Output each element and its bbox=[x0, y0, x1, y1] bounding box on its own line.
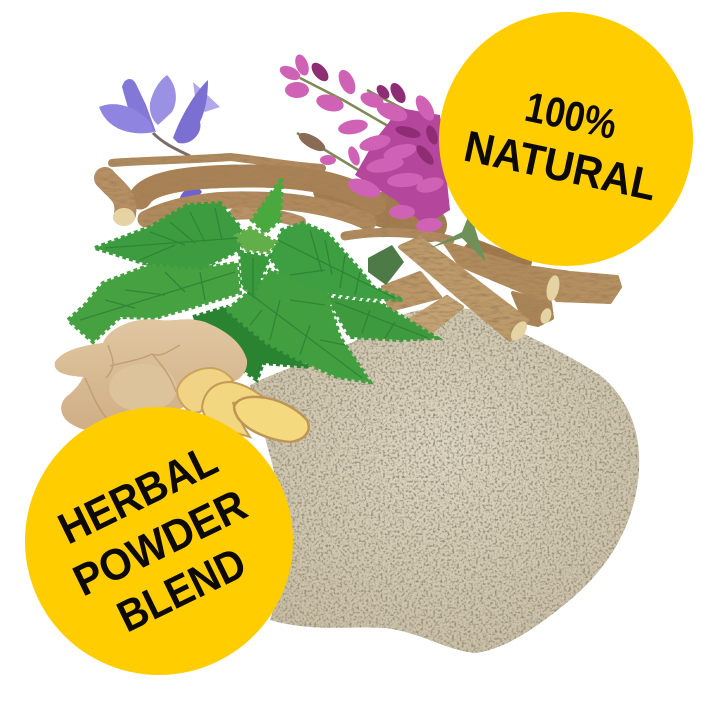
root: thin upper bbox=[112, 157, 322, 168]
leaf: middle small bbox=[240, 252, 270, 297]
badge: herbal powder blend bbox=[25, 407, 293, 675]
leaf: left lower bbox=[68, 263, 240, 342]
leaf: upper left bbox=[95, 203, 240, 268]
root: short behind leaf bbox=[235, 213, 300, 222]
roots bbox=[105, 157, 450, 240]
leaf: top sprout bbox=[252, 178, 282, 233]
flower mass bbox=[355, 108, 450, 225]
leaf veins bbox=[80, 208, 428, 378]
nettle leaves bbox=[68, 178, 437, 382]
text: powder: POWDER bbox=[66, 480, 255, 606]
leaf: upper right bbox=[270, 223, 403, 300]
powder pile bbox=[250, 308, 639, 653]
ginger slices bbox=[177, 368, 233, 413]
icon: blue flower bbox=[99, 75, 220, 200]
root: thick main bbox=[140, 176, 375, 204]
roots: right cluster bbox=[383, 238, 620, 340]
root: lower branch bbox=[345, 233, 450, 240]
icon: small herb sprig bbox=[368, 212, 486, 285]
leaf: center sprout bbox=[236, 228, 276, 252]
icon: purple flower spikes bbox=[277, 53, 450, 233]
leaf: under shadow bbox=[193, 307, 310, 380]
root: filler behind right bbox=[330, 190, 430, 225]
ginger lobe bbox=[109, 364, 177, 412]
text: natural: NATURAL bbox=[460, 122, 661, 210]
ginger creases bbox=[85, 345, 180, 420]
root: knob bbox=[105, 178, 125, 214]
text: herbal: HERBAL bbox=[51, 435, 225, 554]
leaf: right lower bbox=[327, 297, 437, 340]
root cut ends bbox=[113, 208, 562, 343]
text: blend: BLEND bbox=[110, 538, 254, 642]
root: second bbox=[146, 200, 368, 222]
leaf: center large bbox=[227, 270, 370, 382]
text: 100%: 100% bbox=[521, 83, 621, 148]
ginger root bbox=[55, 319, 309, 442]
badge: 100% natural bbox=[439, 12, 693, 266]
blue petal behind root bbox=[180, 188, 202, 200]
